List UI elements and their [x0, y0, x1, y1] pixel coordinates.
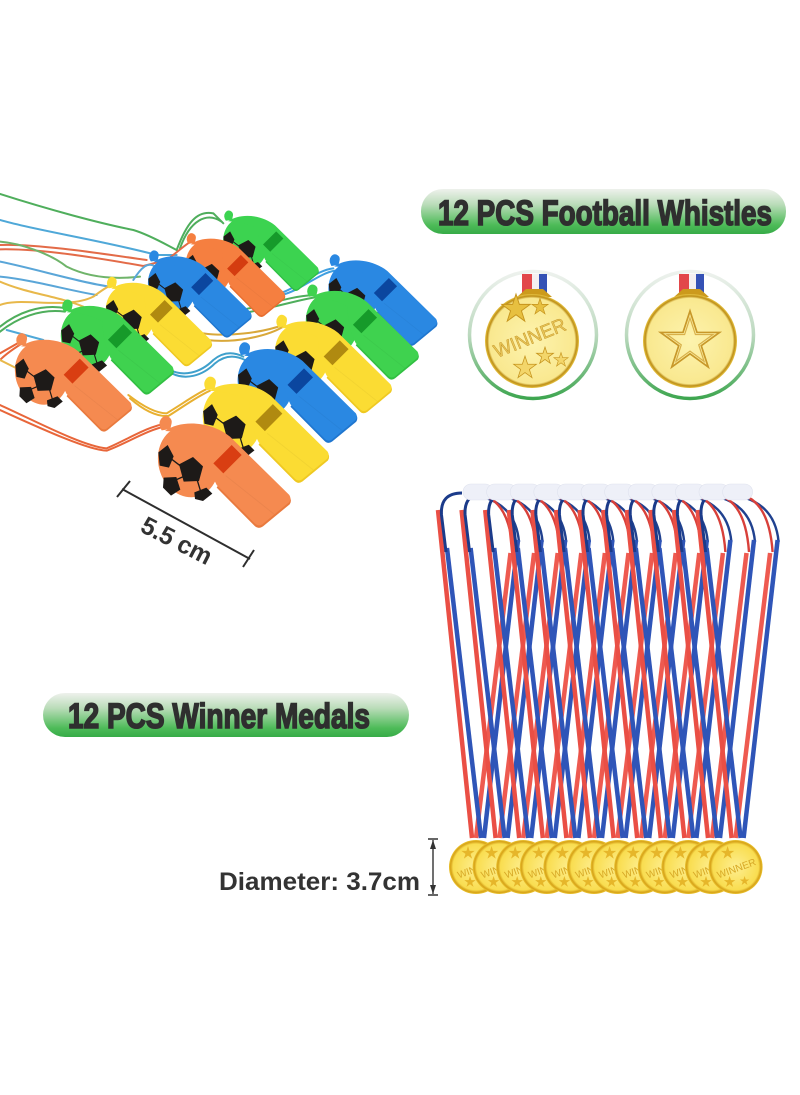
row of 12 gold medals: WINNER: [527, 857, 569, 881]
whistle: orange back: [180, 233, 285, 317]
dimension: medal diameter 3.7cm: [219, 839, 438, 896]
row of 12 gold medals: WINNER: [669, 857, 710, 881]
row of 12 gold medals: WINNER: [480, 857, 522, 881]
row of 12 gold medals: WINNER: [692, 857, 734, 881]
row of 12 gold medals: WINNER: [598, 857, 640, 881]
row of 12 gold medals: WINNER: [551, 857, 592, 881]
hanging medal ribbons: [438, 484, 779, 838]
whistle: blue right: [322, 254, 437, 346]
whistle: green left: [54, 300, 174, 395]
whistle: green back: [217, 210, 319, 291]
heading: 12 PCS Winner Medals: 12 PCS Winner Medals: [68, 697, 370, 736]
whistles photo group: [0, 194, 437, 528]
row of 12 gold medals: WINNER: [645, 857, 687, 881]
whistle: blue front: [231, 342, 357, 443]
row of 12 gold medals: [449, 840, 763, 894]
whistle neck strings: [0, 194, 335, 451]
whistle: yellow right: [268, 315, 392, 413]
medal front: WINNER side: [470, 272, 596, 398]
row of 12 gold medals: WINNER: [456, 857, 498, 881]
dimension: whistle length 5.5 cm: [117, 481, 254, 571]
dimension: whistle length 5.5 cm: 5.5 cm: [136, 511, 217, 571]
whistle: orange left: [8, 333, 132, 432]
whistle: yellow front: [195, 377, 329, 483]
whistle: green right: [299, 285, 419, 380]
whistle: blue middle: [142, 250, 252, 338]
whistle: yellow middle: [99, 277, 212, 366]
row of 12 gold medals: WINNER: [574, 857, 616, 881]
medal back: star side: [626, 272, 754, 398]
medal front: WINNER side: WINNER: [491, 315, 569, 363]
dimension: medal diameter 3.7cm: Diameter: 3.7cm: [219, 868, 420, 896]
row of 12 gold medals: WINNER: [621, 857, 663, 881]
row of 12 gold medals: WINNER: [716, 857, 758, 881]
row of 12 gold medals: WINNER: [503, 857, 545, 881]
whistle: large orange front: [150, 416, 291, 528]
